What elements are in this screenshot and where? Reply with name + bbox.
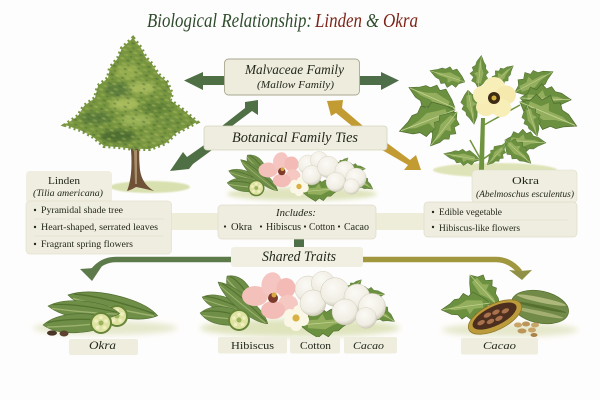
illustration: linden tree — [65, 38, 197, 193]
Linden header: (Tilia americana) — [33, 188, 103, 199]
label: Cotton — [290, 337, 340, 354]
title: Okra — [383, 10, 418, 32]
box: Includes: Okra — [231, 222, 253, 233]
arrow: ties up to family green — [222, 100, 258, 126]
illustration: hibiscus, cotton and cacao group — [199, 270, 400, 339]
box: Botanical Family Ties: Botanical Family Ties — [232, 130, 358, 146]
arrow: family to linden — [184, 72, 224, 90]
Linden traits list: Pyramidal shade tree — [41, 206, 123, 216]
arrow: shared traits to cacao — [362, 260, 532, 280]
box: Includes: Includes: — [275, 208, 316, 219]
label: Okra — [69, 339, 138, 355]
Okra header: (Abelmoschus esculentus) — [476, 189, 574, 200]
panel: Okra — [424, 170, 577, 237]
illustration: okra pods — [33, 285, 177, 336]
Linden header: Linden — [48, 175, 80, 187]
box: Shared Traits — [231, 247, 363, 267]
illustration: central plant group — [226, 150, 377, 202]
box: Malvaceae family: Malvaceae Family — [244, 62, 344, 77]
Okra header: Okra — [512, 175, 539, 187]
box: Includes: Cacao — [344, 222, 369, 233]
arrow: shared traits to okra — [80, 260, 232, 281]
title: & — [366, 10, 379, 32]
label: Okra: Okra — [89, 340, 116, 352]
Linden traits list: Heart-shaped, serrated leaves — [41, 223, 158, 233]
box: Malvaceae family: (Mallow Family) — [257, 80, 335, 91]
label: Cacao: Cacao — [353, 340, 385, 352]
illustration: cacao pods — [439, 266, 578, 341]
Linden traits list: Fragrant spring flowers — [41, 239, 133, 250]
arrow: family to okra — [360, 72, 399, 90]
label: Cacao right — [461, 338, 538, 354]
connector: includes to okra — [375, 213, 425, 230]
illustration: okra plant — [394, 54, 584, 177]
title: Biological Relationship: — [147, 10, 312, 32]
label: Hibiscus: Hibiscus — [231, 340, 274, 352]
label: Cacao right: Cacao — [483, 340, 517, 352]
label: Hibiscus — [218, 337, 287, 354]
arrow: ties to linden — [170, 143, 212, 171]
box: Shared Traits: Shared Traits — [262, 249, 336, 265]
label: Cotton: Cotton — [300, 340, 332, 352]
box: Malvaceae family — [224, 59, 360, 95]
box: Includes: Hibiscus — [266, 222, 301, 233]
connector: includes to shared traits — [294, 238, 304, 248]
Okra traits list: Edible vegetable — [439, 208, 502, 218]
title: Linden — [314, 10, 362, 32]
box: Includes: Cotton — [309, 222, 335, 233]
Okra traits list — [424, 202, 577, 237]
Linden header — [26, 171, 112, 203]
box: Botanical Family Ties — [204, 126, 387, 150]
arrow: ties up to family gold — [327, 100, 363, 126]
label: Cacao — [344, 337, 397, 354]
box: Includes — [218, 205, 376, 239]
panel: Linden — [26, 171, 172, 254]
Okra header — [472, 170, 577, 203]
arrow: ties to okra — [382, 143, 421, 170]
Okra traits list: Hibiscus-like flowers — [439, 223, 520, 234]
Linden traits list — [26, 201, 172, 254]
connector: linden to includes — [171, 213, 219, 230]
